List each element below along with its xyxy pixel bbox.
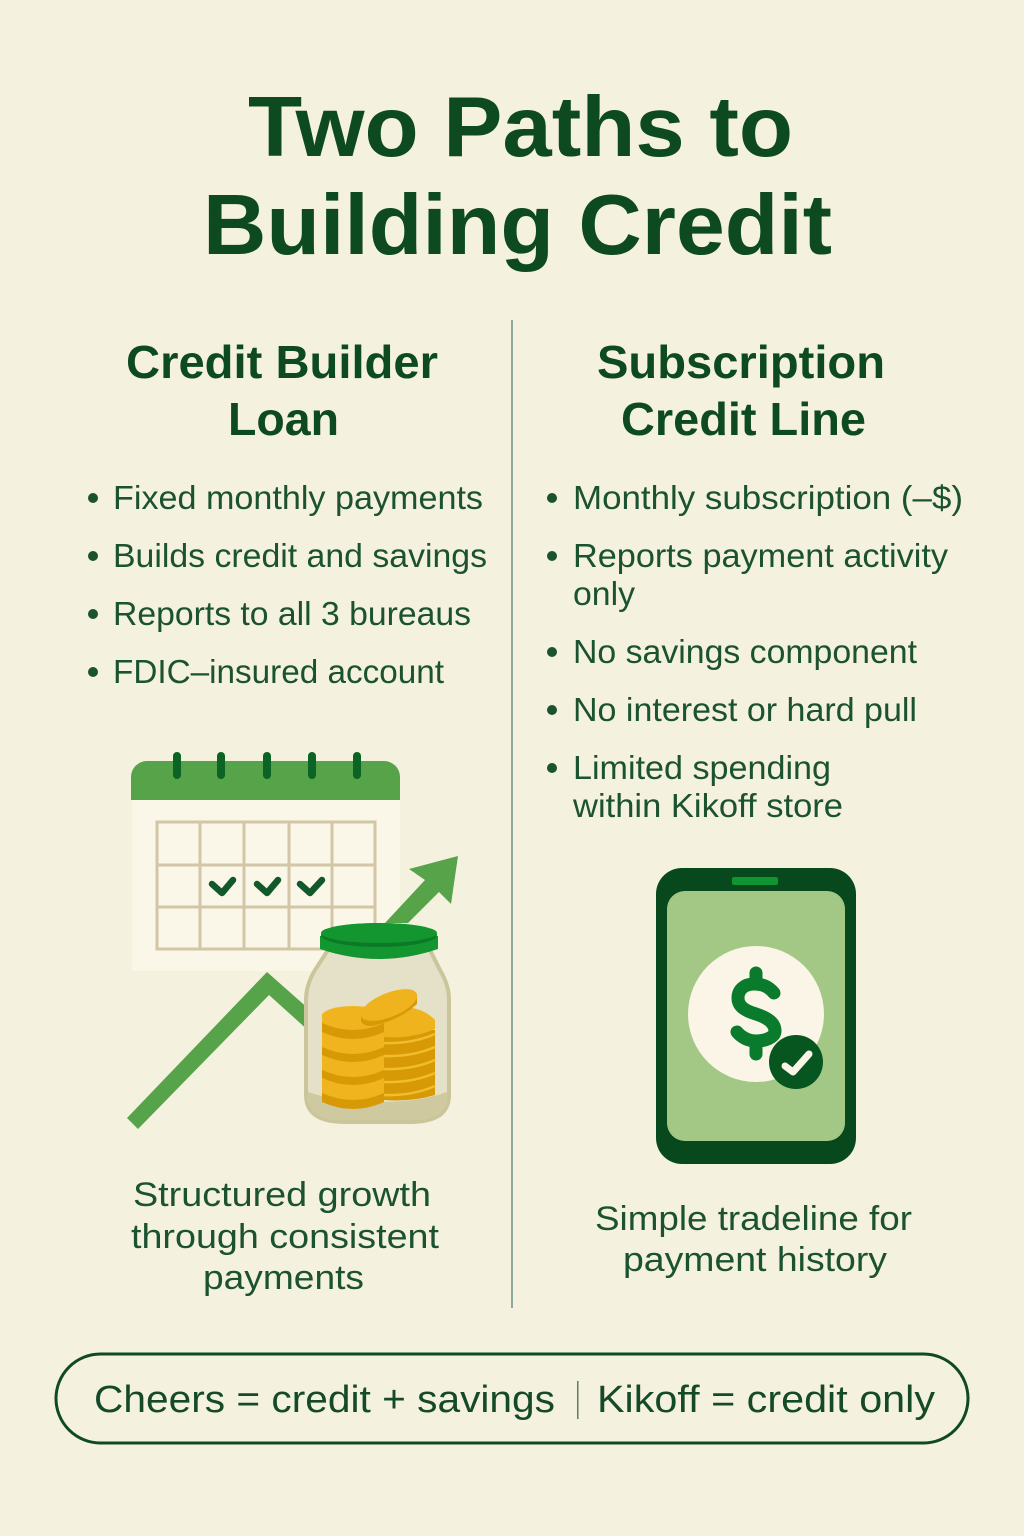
heading: subscription credit line: Credit Line (621, 393, 866, 445)
heading: credit builder loan: Loan (228, 393, 339, 445)
heading: subscription credit line (597, 336, 885, 445)
bullet list: loan features: FDIC–insured account (113, 653, 444, 690)
icon: dollar sign (737, 973, 775, 1054)
caption: loan: payments (203, 1259, 364, 1297)
summary pill: Kikoff = credit only (597, 1379, 935, 1421)
summary pill: Cheers = credit + savings (94, 1379, 555, 1421)
icon: calendar (131, 756, 400, 971)
bullet list: loan features: Builds credit and savings (113, 537, 487, 574)
panel: subscription credit line (547, 336, 963, 1279)
caption: subscription: Simple tradeline for (595, 1200, 912, 1238)
icon: phone with dollar and check (656, 868, 856, 1164)
heading: credit builder loan: Credit Builder (126, 336, 438, 388)
coins left stack (322, 1006, 384, 1109)
bullet list: subscription features: only (573, 575, 636, 612)
top coin (357, 983, 421, 1027)
coins right stack (384, 1008, 435, 1100)
title: Two Paths to (248, 80, 793, 175)
bullet list: subscription features: No interest or hard pull (573, 691, 917, 728)
title: Building Credit (203, 178, 832, 273)
bullet list: subscription features: Monthly subscription (–$) (573, 479, 963, 516)
caption: loan: through consistent (131, 1218, 439, 1256)
illustration: calendar, growth arrow and coin jar (127, 756, 458, 1129)
bullet list: loan features: Fixed monthly payments (113, 479, 483, 516)
title (203, 80, 832, 273)
bullet list: subscription features: Reports payment activity (573, 537, 949, 574)
panel: credit builder loan (88, 336, 487, 1297)
caption: subscription: payment history (623, 1241, 888, 1279)
caption: loan (131, 1176, 439, 1297)
icon: growth arrow (127, 856, 458, 1129)
bullet list: subscription features: within Kikoff store (572, 787, 843, 824)
bullet list: subscription features: No savings component (573, 633, 917, 670)
bullet list: loan features: Reports to all 3 bureaus (113, 595, 471, 632)
heading: subscription credit line: Subscription (597, 336, 885, 388)
bullet list: subscription features (547, 479, 963, 824)
bullet list: subscription features: Limited spending (573, 749, 831, 786)
heading: credit builder loan (126, 336, 438, 445)
column divider (511, 320, 513, 1308)
bullet list: loan features (88, 479, 487, 690)
caption: subscription (595, 1200, 912, 1279)
icon: coin jar (306, 923, 449, 1122)
caption: loan: Structured growth (133, 1176, 431, 1214)
summary pill (56, 1354, 968, 1443)
jar lid (320, 923, 438, 959)
icon: check badge (769, 1035, 823, 1089)
